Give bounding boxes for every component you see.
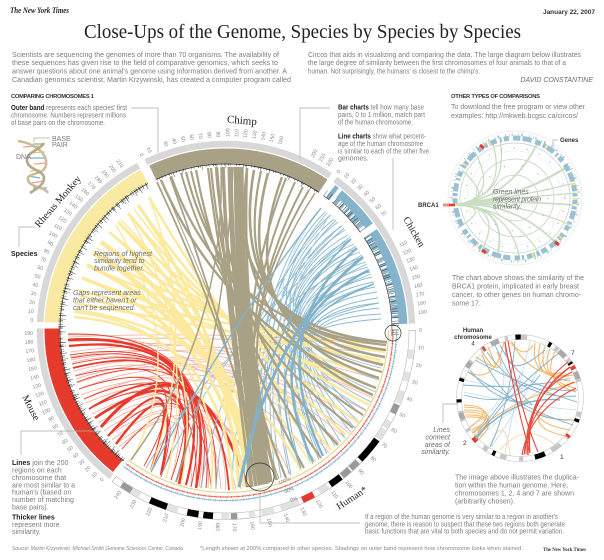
label: BRCA1: BRCA1 [418, 203, 439, 209]
tick labels: human left: 180 [215, 523, 222, 532]
tick labels: human right: 160 [248, 521, 255, 530]
tick labels: mouse: 20 [84, 465, 92, 473]
tick labels: mouse: 120 [35, 391, 45, 399]
yellow marks [455, 138, 575, 258]
note: gaps [73, 290, 141, 312]
note: lines: human's (based on [12, 490, 71, 496]
caption: BRCA1 chart: The chart above shows the similarity of the [452, 275, 584, 282]
tick labels: chicken: 0 [336, 169, 343, 175]
bar chart combs [58, 163, 399, 462]
note: if a region of the human genome [260, 493, 565, 536]
note: lines connect [421, 404, 458, 456]
note: species: Species [11, 251, 38, 258]
ribbons: all species lines [68, 167, 387, 490]
gene dots [465, 148, 565, 248]
tick labels: chicken: 170 [415, 291, 425, 299]
tick labels: chimp left: 80 [205, 132, 212, 138]
caption: duplication chart [455, 474, 580, 506]
percent scale labels: 0% [289, 495, 299, 504]
label: human chromosome 4: 4 [471, 342, 475, 348]
tick labels: chimp right: 120 [243, 129, 250, 138]
tick labels: mouse [24, 331, 106, 483]
tick labels: mouse: 160 [26, 357, 36, 364]
tick labels: rhesus monkey: 40 [32, 282, 39, 289]
text: download link: To download the free program or view other [451, 104, 586, 111]
tick labels: mouse: 140 [30, 374, 40, 382]
tick labels: human right: 10 [418, 345, 424, 352]
tick labels: chicken: 120 [402, 248, 413, 257]
tick labels: chimp right: 130 [252, 130, 259, 140]
tick labels: chimp right [225, 128, 335, 168]
note: lines connect: Lines [433, 427, 450, 434]
intro text right: the large degree of similarity between the first chromosomes of four animals to that of a [308, 60, 566, 67]
ribbons: chimp [131, 167, 387, 487]
tick labels: chicken: 110 [398, 240, 409, 249]
caption: BRCA1 chart [452, 275, 584, 308]
chart: BRCA1 similarity circle [443, 131, 582, 265]
ribbons: rhesus monkey [74, 197, 386, 490]
tick labels: chicken: 190 [418, 309, 427, 316]
tick labels: rhesus monkey: 140 [68, 200, 78, 211]
tick labels: human right [231, 328, 424, 532]
stains black [40, 144, 412, 516]
grid rings [448, 131, 582, 265]
tick labels: mouse: 100 [41, 407, 52, 416]
note: outer band: of base pairs on the chromosome. [11, 120, 105, 127]
percent scale labels: 100% [278, 476, 292, 486]
section heading: other types: OTHER TYPES OF COMPARISONS [451, 94, 540, 100]
tick labels: chimp left [138, 131, 221, 158]
intro text right: human. Not surprisingly, the humans' is closest to the chimp's. [308, 68, 480, 76]
tick labels: human right: 40 [405, 396, 413, 404]
note: lines: similarity. [12, 529, 41, 536]
section heading: comparing chromosomes: COMPARING CHROMOSOMES 1 [11, 94, 95, 100]
note: if a region of the human genome: basic functions that are vital to both species and do not permit variation. [365, 528, 564, 536]
human outer chromosome band [40, 144, 412, 516]
tick labels: rhesus monkey: 0 [30, 318, 33, 324]
tick labels: mouse: 0 [99, 477, 106, 483]
tick labels: human left: 210 [162, 513, 171, 523]
tick labels: human right: 130 [298, 507, 307, 517]
chromosome ring [459, 337, 581, 459]
caption: duplication chart: tion within the human genome. Here, [455, 482, 568, 490]
note: if a region of the human genome: genome, there is reason to suspect that these two regions both generate [365, 522, 565, 528]
note: gaps: Gaps represent areas [73, 290, 141, 297]
tick labels: rhesus monkey: 130 [62, 208, 73, 218]
tick labels: human right: 20 [415, 363, 422, 369]
note: bar charts and line charts: Bar charts tell how many base [338, 104, 424, 112]
tick labels: rhesus monkey: 210 [115, 159, 124, 169]
label: genes: Genes [560, 138, 579, 144]
caption: BRCA1 chart: cancer, to other genes on human chromo- [452, 292, 582, 299]
BRCA1 marker [443, 204, 455, 206]
tick labels: human right: 60 [390, 427, 398, 435]
tick labels: human right: 100 [343, 480, 353, 490]
note: lines: represent more [12, 522, 60, 529]
note: lines: regions on each [12, 468, 62, 474]
note: green lines: Green lines [493, 189, 529, 196]
intro text right [308, 52, 593, 84]
label: base pair: BASE [52, 136, 71, 143]
tick labels: mouse: 90 [48, 415, 56, 423]
note: bar charts and line charts: genomes. [338, 156, 369, 162]
tick labels: chicken: 20 [350, 177, 358, 186]
callout circle: similarity region [246, 463, 274, 491]
tick labels: rhesus monkey: 30 [30, 291, 37, 298]
tick labels: mouse: 180 [25, 339, 34, 346]
note: gaps: can't be sequenced. [73, 305, 135, 312]
note: green lines: represent protein [493, 196, 541, 204]
masthead logo: The New York Times [10, 5, 70, 15]
tick labels: mouse: 190 [24, 331, 33, 337]
caption: BRCA1 chart: BRCA1 protein, implicated in early breast [452, 284, 579, 290]
caption: duplication chart: The image above illustrates the duplica- [455, 474, 580, 482]
chicken bar band [52, 156, 400, 504]
tick labels: chimp left: 0 [138, 152, 144, 158]
tick labels: rhesus monkey: 160 [80, 187, 90, 197]
percent scale labels: 50% [284, 486, 296, 495]
tick labels: mouse: 50 [66, 445, 75, 453]
species label: mouse: Mouse [19, 393, 42, 423]
tick labels: human right: 150 [265, 518, 273, 528]
tick labels: chimp left: 40 [170, 138, 177, 145]
tick labels: rhesus monkey: 110 [52, 223, 63, 232]
tick labels: chicken: 70 [380, 210, 388, 218]
tick labels: rhesus monkey: 170 [86, 181, 96, 191]
intro text right: Circos that aids in visualizing and comparing the data. The large diagram below illustrates [308, 52, 581, 59]
rhesus monkey bar band [52, 156, 400, 504]
note: bar charts and line charts: pairs, 0 to 1 million, match part [338, 112, 425, 119]
tick labels: rhesus monkey: 90 [46, 240, 54, 248]
note: lines: are most similar to a [12, 482, 75, 490]
intro text left: Canadian genomics scientist, Martin Krzywinski, has created a computer program called [12, 77, 291, 84]
caption: duplication chart: chromosomes 1, 2, 4 and 7 are shown [455, 490, 574, 498]
light blue ribbons [464, 342, 576, 453]
label: chromosome 2: 2 [463, 440, 467, 447]
note: outer band [11, 105, 158, 153]
tick labels: mouse: 60 [61, 438, 69, 446]
callout circle: gene start [385, 325, 401, 341]
caption: BRCA1 chart: some 17. [452, 300, 481, 308]
tick labels: chimp right: 140 [260, 131, 268, 141]
tick labels: mouse: 150 [28, 366, 38, 373]
chimp bar band [52, 156, 400, 504]
tick labels: human right: 140 [282, 513, 290, 523]
chart: duplication within human genome [459, 337, 581, 459]
intro text left: Scientists are sequencing the genomes of more than 70 organisms. The availability of [12, 52, 279, 59]
stain red [40, 144, 412, 516]
intro text left: answer questions about one animal's genome using information derived from another. A [12, 68, 287, 76]
intro text left: these sequences has given rise to the field of comparative genomics, which seeks to [12, 60, 278, 67]
source: Source: Martin Krzywinski, Michael Smith Genome Sciences Center, Canada [12, 546, 183, 552]
tick labels: human left [113, 490, 222, 532]
note: lines connect: connect [425, 434, 451, 442]
label: human chromosome 4: Human [463, 328, 483, 334]
tick labels: chimp right: 220 [325, 157, 335, 168]
text: download link [451, 104, 586, 120]
note: lines: number of matching [12, 497, 74, 504]
tick labels: chimp left: 90 [214, 131, 221, 137]
green similarity lines [453, 139, 576, 260]
tick labels: human right: 170 [231, 523, 237, 532]
tick labels: chicken: 150 [411, 273, 421, 282]
tick labels: rhesus monkey: 60 [36, 265, 44, 272]
tick labels: human right: 30 [411, 379, 418, 387]
species label: rhesus monkey: Rhesus Monkey [33, 174, 84, 230]
tick labels: human left: 240 [113, 490, 123, 501]
footnote: *Length shown at 200% compared to other species. Shadings on outer band represent how chromosome looks when stained. [200, 546, 523, 552]
tick labels: chicken [336, 169, 427, 316]
tick labels: chimp left: 70 [196, 133, 203, 139]
tick labels: chicken: 30 [356, 183, 365, 192]
stains mid gray [40, 144, 412, 516]
text: download link: examples: http://mkweb.bcgsc.ca/circos/ [451, 113, 578, 120]
tick labels: human right: 0 [419, 328, 422, 334]
tick labels: rhesus monkey: 80 [43, 248, 50, 256]
tick labels: rhesus monkey: 100 [48, 230, 58, 240]
orange ribbons [464, 342, 577, 455]
ribbons: chicken thick [151, 208, 374, 487]
tick labels: human right: 90 [356, 468, 365, 477]
note: species [11, 227, 38, 258]
icon: DNA helix [18, 141, 48, 193]
note: if a region of the human genome: If a region of the human genome is very similar to a region in another's [365, 514, 558, 521]
outer gene band [455, 138, 575, 258]
tick labels: chimp right: 100 [225, 128, 231, 137]
tick labels: chimp right: 160 [277, 135, 285, 146]
note: outer band: chromosome. Numbers represent millions [11, 112, 126, 120]
tick labels: human right: 110 [329, 490, 339, 500]
ribbons: mouse light [68, 335, 386, 490]
tick labels: chicken: 160 [414, 282, 423, 290]
note: lines connect: similarity. [421, 449, 450, 456]
genes label leader [553, 140, 558, 148]
tick labels: chicken: 10 [343, 172, 351, 180]
note: lines: Lines join the 200 [12, 460, 69, 467]
ring stains [459, 337, 581, 459]
tick labels: human left: 230 [129, 499, 138, 510]
label: chromosome 7: 7 [571, 350, 575, 357]
tick labels: chicken: 140 [409, 265, 419, 273]
tick labels: rhesus monkey: 180 [93, 175, 103, 185]
tick labels: human left: 200 [179, 518, 187, 528]
note: lines connect: areas of [425, 442, 451, 449]
percent scale labels [278, 476, 299, 504]
tick labels: mouse: 10 [90, 471, 99, 479]
tick labels: chimp left: 30 [161, 140, 169, 148]
note: lines: Thicker lines [12, 514, 55, 522]
tick labels: chicken: 40 [363, 190, 371, 198]
tick labels: mouse: 70 [56, 431, 65, 439]
tick labels: mouse: 110 [38, 399, 48, 408]
caption: duplication chart: (arbitrarily chosen). [455, 498, 515, 506]
tick labels: rhesus monkey: 190 [100, 169, 110, 180]
note: lines [12, 431, 100, 536]
note: gaps: that either haven't or [73, 298, 137, 304]
footer credit: The New York Times [543, 547, 587, 553]
note: bar charts and line charts [300, 104, 429, 230]
label: DNA: DNA [16, 154, 31, 161]
note: regions of highest similarity: similarity tend to [94, 258, 145, 265]
tick labels: rhesus monkey: 200 [107, 164, 117, 174]
note: bar charts and line charts: of the human chromosome. [338, 120, 413, 126]
intro text right: DAVID CONSTANTINE [520, 77, 593, 84]
tick labels: human left: 220 [145, 507, 154, 517]
note: bar charts and line charts: Line charts show what percent- [338, 134, 427, 140]
tick labels: chicken: 130 [406, 256, 416, 265]
tick labels: chimp right: 210 [318, 153, 327, 163]
red ribbons [505, 341, 576, 455]
tick labels: chimp right: 110 [234, 129, 241, 137]
tick labels: rhesus monkey: 120 [57, 215, 68, 225]
blue ribbons [463, 341, 577, 447]
label: base pair: PAIR [52, 142, 68, 149]
tick labels: rhesus monkey: 50 [34, 273, 41, 281]
intro text left [12, 52, 291, 84]
main circos diagram [24, 128, 427, 532]
stains light [40, 144, 412, 516]
note: regions of highest similarity: Regions of highest [94, 251, 153, 258]
outer bands of four species [40, 144, 412, 516]
tick labels: mouse: 130 [32, 383, 42, 391]
label: human chromosome 4: chromosome [454, 335, 492, 341]
tick labels: mouse: 40 [72, 452, 80, 460]
tick labels: chimp right: 200 [310, 148, 319, 159]
species label: chicken: Chicken [400, 215, 427, 249]
note: lines: base pairs). [12, 504, 49, 512]
date: January 22, 2007 [543, 9, 595, 16]
red marks [480, 145, 559, 253]
tick labels: human left: 190 [197, 521, 204, 530]
tick labels: rhesus monkey: 20 [29, 300, 35, 306]
tick labels: mouse: 30 [78, 459, 86, 467]
tick labels: mouse: 80 [52, 423, 60, 431]
tick labels: human right: 50 [398, 412, 406, 420]
mouse bar band [52, 156, 400, 504]
tick labels: rhesus monkey: 150 [73, 194, 84, 204]
tick labels: human right: 120 [314, 499, 323, 510]
tick labels: chimp left: 60 [188, 134, 194, 141]
label: base pair [34, 136, 71, 149]
species label: chimp: Chimp [226, 114, 258, 128]
label: chromosome 1: 1 [560, 454, 564, 461]
note: regions of highest similarity: bundle together. [94, 266, 144, 272]
title: Close-Ups of the Genome, Species by Species by Species [84, 21, 521, 43]
tick labels: chicken: 50 [369, 196, 377, 205]
tick labels: mouse: 170 [25, 348, 35, 355]
note: green lines [493, 189, 541, 210]
tick labels: human right: 80 [369, 455, 377, 464]
tick labels: chicken: 180 [417, 300, 426, 307]
tick labels: chimp left: 10 [145, 146, 152, 154]
tick labels: chicken: 60 [375, 203, 383, 211]
ribbons: chicken thin [146, 208, 387, 489]
note: green lines: similarity. [493, 204, 522, 210]
note: lines: chromosome that [12, 475, 66, 482]
note: outer band: Outer band represents each species' first [11, 105, 127, 112]
tick labels: rhesus monkey: 10 [28, 309, 34, 315]
label: human chromosome 4 [454, 328, 492, 348]
tick labels: chimp right: 150 [269, 133, 277, 143]
species label: human: Human* [335, 485, 370, 513]
tick labels: rhesus monkey: 70 [39, 256, 47, 264]
tick labels: chimp left: 50 [179, 136, 186, 143]
note: regions of highest similarity [94, 251, 153, 272]
note: bar charts and line charts: age of the human chromosome [338, 141, 423, 148]
tick labels: human right: 70 [380, 442, 388, 450]
human line charts [123, 330, 398, 502]
note: bar charts and line charts: is similar to each of the other five [338, 148, 429, 156]
ribbons: mouse strong [68, 334, 248, 490]
tick labels: rhesus monkey [28, 159, 124, 324]
